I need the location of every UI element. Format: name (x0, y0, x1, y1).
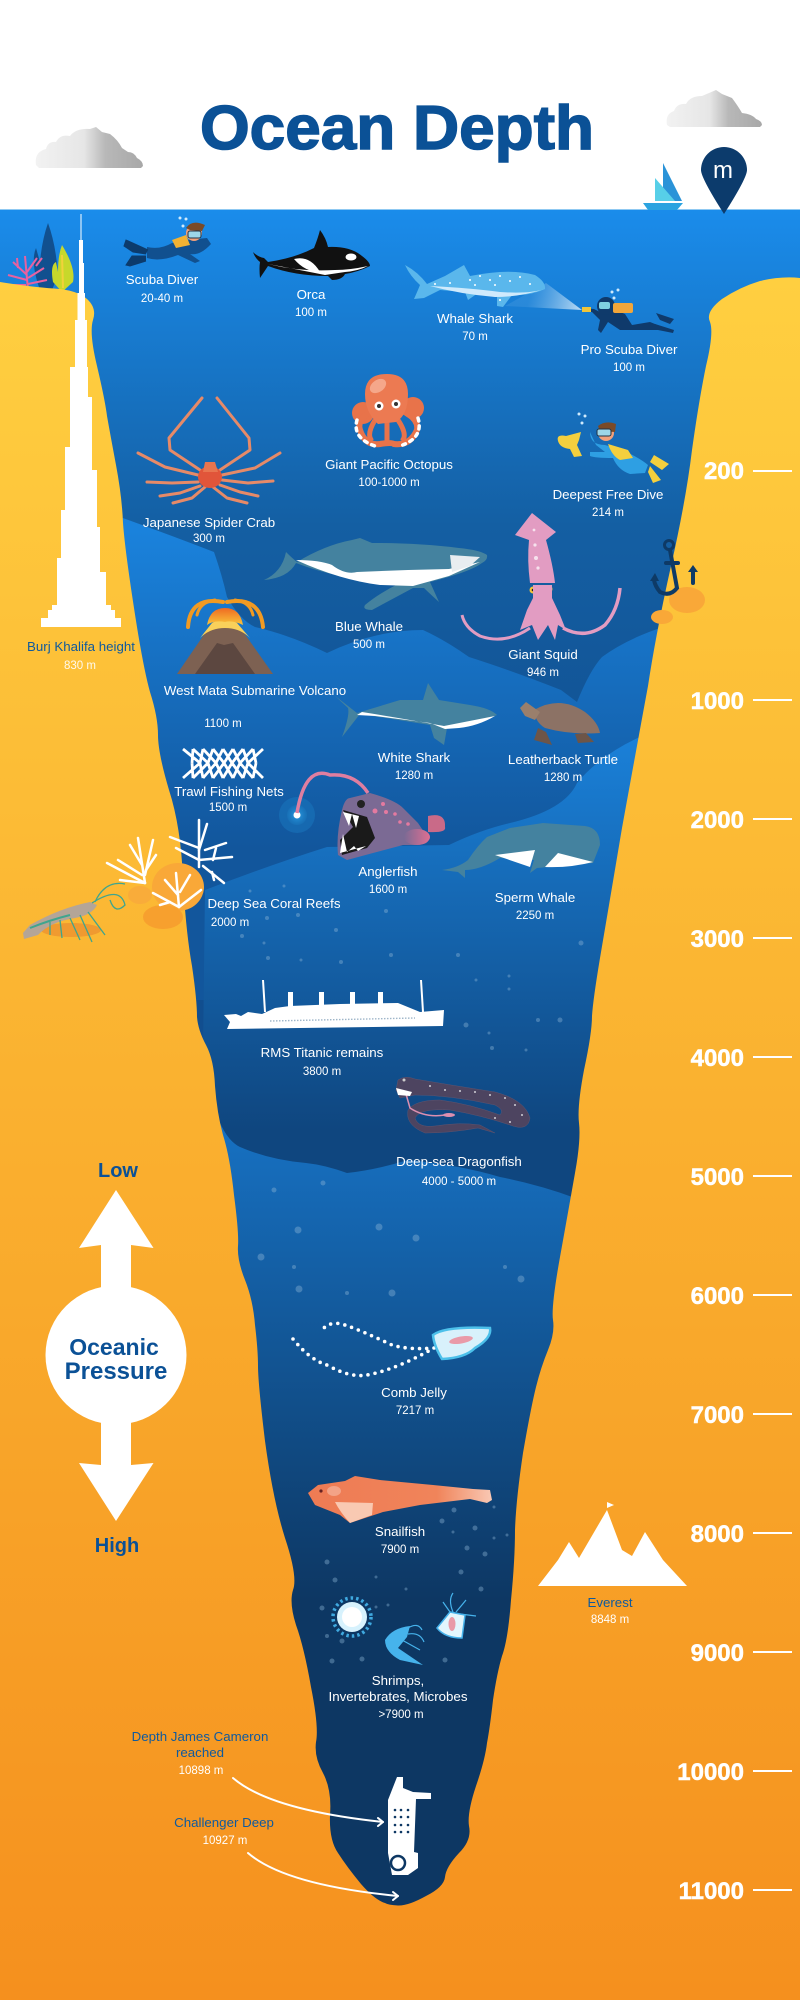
icon: pro scuba diver (582, 288, 674, 333)
icon: right cloud (667, 90, 762, 127)
label: shrimps invertebrates microbes (329, 1673, 468, 1721)
icon: anchor and rocks (650, 540, 705, 624)
icon: unit pin: m (713, 157, 733, 184)
icon: shrimp (23, 883, 125, 942)
label: coral reefs: Deep Sea Coral Reefs (207, 896, 341, 911)
icon: comb jelly (293, 1323, 490, 1376)
label: Challenger Deep (174, 1815, 274, 1847)
scale: depth markers: 200 (704, 458, 744, 485)
label: spider crab: Japanese Spider Crab (143, 515, 275, 530)
label: volcano (164, 683, 346, 730)
pressure diagram: Pressure (65, 1358, 167, 1385)
label: pro scuba diver: Pro Scuba Diver (581, 342, 678, 357)
icon: titanic remains (224, 980, 444, 1029)
label: spider crab (143, 515, 275, 545)
label: comb jelly: 7217 m (396, 1405, 434, 1417)
icon: anglerfish (279, 773, 445, 860)
label: titanic: RMS Titanic remains (261, 1045, 384, 1060)
icon: whale shark (405, 265, 545, 307)
label: snailfish: Snailfish (375, 1524, 425, 1539)
scale: depth markers: 9000 (691, 1640, 744, 1667)
icon: deep shrimp (385, 1625, 424, 1665)
label: volcano: West Mata Submarine Volcano (164, 683, 346, 698)
label: trawl nets: Trawl Fishing Nets (174, 784, 284, 799)
label: snailfish: 7900 m (381, 1544, 419, 1556)
icon: sperm whale (442, 823, 600, 878)
label: dragonfish (396, 1154, 522, 1188)
label: white shark: 1280 m (395, 770, 433, 782)
scale: depth markers (677, 458, 792, 1905)
scale: depth markers: 3000 (691, 926, 744, 953)
icon: trawl fishing net (183, 749, 263, 778)
sky background (0, 0, 800, 210)
scale: depth markers: 10000 (677, 1759, 744, 1786)
label: scuba diver (126, 272, 199, 305)
label: trawl nets (174, 784, 284, 814)
label: everest: 8848 m (591, 1614, 629, 1626)
scale: depth markers: 1000 (691, 688, 744, 715)
icon: orca (253, 230, 370, 280)
label: comb jelly: Comb Jelly (381, 1385, 447, 1400)
label: scuba diver: 20-40 m (141, 293, 183, 305)
label: blue whale: 500 m (353, 639, 385, 651)
scale: depth markers: 6000 (691, 1283, 744, 1310)
label: leatherback turtle: Leatherback Turtle (508, 752, 618, 767)
pressure diagram: Low (98, 1160, 138, 1182)
scale: depth markers: 2000 (691, 807, 744, 834)
label: sperm whale: 2250 m (516, 910, 554, 922)
label: octopus: Giant Pacific Octopus (325, 457, 453, 472)
label: orca (295, 287, 327, 319)
label: orca: Orca (297, 287, 326, 302)
label: pro scuba diver (581, 342, 678, 374)
scale: depth markers: 5000 (691, 1164, 744, 1191)
icon: sailboat (643, 163, 683, 210)
label: free diver (553, 487, 663, 519)
label: scuba diver: Scuba Diver (126, 272, 199, 287)
Burj Khalifa silhouette (41, 214, 121, 627)
icon: giant squid (462, 513, 620, 640)
label: everest: Everest (587, 1595, 633, 1610)
icon: leatherback turtle (520, 702, 600, 745)
label: shrimps invertebrates microbes: >7900 m (378, 1709, 424, 1721)
scale: depth markers: 7000 (691, 1402, 744, 1429)
label: octopus: 100-1000 m (358, 477, 420, 489)
label: trawl nets: 1500 m (209, 802, 247, 814)
label: free diver: 214 m (592, 507, 624, 519)
icon: snailfish (308, 1476, 492, 1523)
label: James Cameron depth: Depth James Cameron (132, 1729, 268, 1744)
icon: spider crab (138, 398, 280, 503)
label: coral reefs (207, 896, 341, 929)
icon: dragonfish (396, 1077, 530, 1133)
arrow: James Cameron depth (233, 1778, 383, 1826)
pressure diagram: Oceanic (69, 1334, 159, 1360)
reef plants on left shore (6, 223, 74, 292)
scale: depth markers: 11000 (679, 1878, 744, 1905)
title: Ocean Depth (200, 94, 594, 163)
icon: scuba diver (124, 216, 211, 266)
icon: white shark (334, 683, 497, 745)
label: blue whale (335, 619, 403, 651)
label: giant squid: Giant Squid (508, 647, 578, 662)
label: James Cameron depth (132, 1729, 268, 1777)
label: leatherback turtle (508, 752, 618, 784)
label: free diver: Deepest Free Dive (553, 487, 663, 502)
label: orca: 100 m (295, 307, 327, 319)
label: everest (587, 1595, 633, 1626)
label: anglerfish: 1600 m (369, 884, 407, 896)
icon: submersible (388, 1777, 431, 1875)
label: titanic (261, 1045, 384, 1078)
scale: depth markers: 4000 (691, 1045, 744, 1072)
arrow: Challenger Deep (248, 1853, 398, 1900)
icon: blue whale (264, 538, 487, 610)
label: coral reefs: 2000 m (211, 917, 249, 929)
label: spider crab: 300 m (193, 533, 225, 545)
label: dragonfish: Deep-sea Dragonfish (396, 1154, 522, 1169)
label: burj khalifa: Burj Khalifa height (27, 639, 135, 654)
label: James Cameron depth: 10898 m (179, 1765, 223, 1777)
scale: depth markers: 8000 (691, 1521, 744, 1548)
icon: deep jellyfish (437, 1593, 476, 1638)
icon: free diver (558, 412, 669, 483)
label: leatherback turtle: 1280 m (544, 772, 582, 784)
label: titanic: 3800 m (303, 1066, 341, 1078)
label: shrimps invertebrates microbes: Shrimps, (372, 1673, 424, 1688)
label: burj khalifa (27, 639, 135, 672)
particles (240, 884, 584, 1664)
label: white shark (378, 750, 451, 782)
label: octopus (325, 457, 453, 489)
icon: mountain everest (538, 1502, 687, 1586)
label: volcano: 1100 m (204, 718, 242, 730)
label: burj khalifa: 830 m (64, 660, 96, 672)
label: whale shark: 70 m (462, 331, 488, 343)
icon: deep sea coral (107, 820, 232, 929)
label: whale shark (437, 311, 513, 343)
label: sperm whale (495, 890, 575, 922)
label: dragonfish: 4000 - 5000 m (422, 1176, 496, 1188)
label: snailfish (375, 1524, 425, 1556)
label: anglerfish (358, 864, 418, 896)
label: whale shark: Whale Shark (437, 311, 513, 326)
label: anglerfish: Anglerfish (358, 864, 418, 879)
label: giant squid: 946 m (527, 667, 559, 679)
label: Challenger Deep: 10927 m (203, 1835, 247, 1847)
icon: microbe (333, 1598, 371, 1636)
light beam from diver to whale shark (505, 283, 582, 310)
label: shrimps invertebrates microbes: Invertebrates, Microbes (329, 1689, 468, 1704)
label: comb jelly (381, 1385, 447, 1417)
pressure diagram: High (95, 1535, 139, 1557)
label: white shark: White Shark (378, 750, 451, 765)
icon: left cloud (36, 127, 143, 168)
label: Challenger Deep: Challenger Deep (174, 1815, 274, 1830)
icon: volcano (177, 600, 273, 674)
pressure diagram (46, 1160, 186, 1557)
icon: unit pin (701, 147, 747, 214)
icon: octopus (352, 374, 424, 446)
label: blue whale: Blue Whale (335, 619, 403, 634)
label: James Cameron depth: reached (176, 1745, 224, 1760)
label: sperm whale: Sperm Whale (495, 890, 575, 905)
label: pro scuba diver: 100 m (613, 362, 645, 374)
label: giant squid (508, 647, 578, 679)
